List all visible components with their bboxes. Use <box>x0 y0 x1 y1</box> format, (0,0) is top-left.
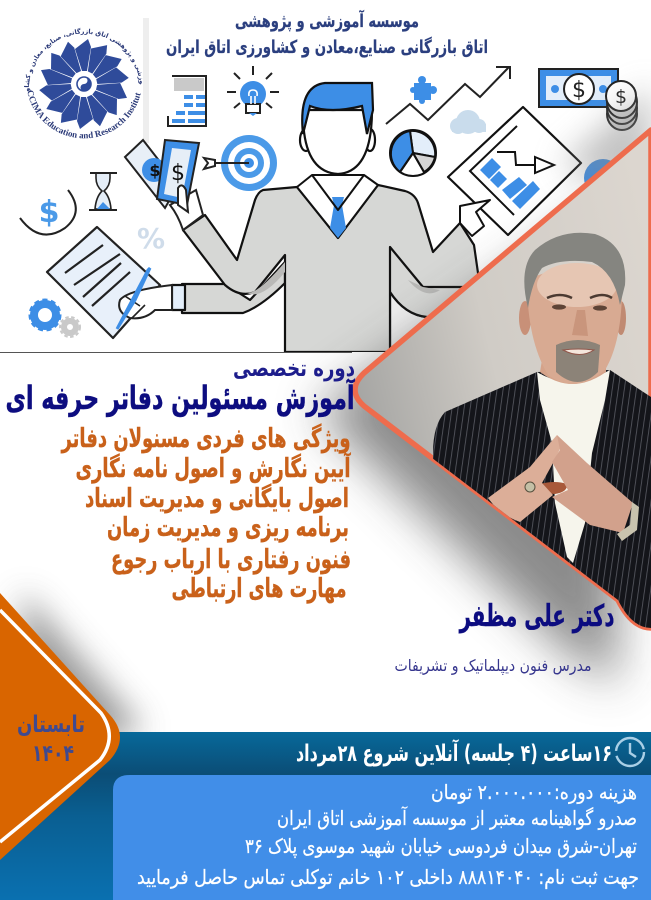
icon: back banknote: $ <box>149 161 161 180</box>
illustration: businessman with finance icons <box>20 18 637 352</box>
registration contact: جهت ثبت نام: ۸۸۸۱۴۰۴۰ داخلی ۱۰۲ خانم توکلی تماس حاصل فرمایید <box>137 865 639 889</box>
face <box>528 274 622 368</box>
pie chart <box>390 130 436 176</box>
ring <box>525 482 535 492</box>
season label: تابستان <box>17 712 85 738</box>
logo blades <box>38 39 130 129</box>
instructor figure <box>433 233 651 640</box>
icon: hourglass <box>89 173 117 210</box>
man body and arms <box>172 185 490 352</box>
logo: ICCIMA Education and Research Institute <box>24 28 142 138</box>
course topics list: اصول بایگانی و مدیریت اسناد <box>85 483 349 514</box>
forehead <box>537 263 617 307</box>
icon: dollar with arc <box>20 190 76 235</box>
icon: hand with front banknote: $ <box>171 161 185 186</box>
course title block <box>6 356 355 417</box>
photo panel: instructor portrait <box>355 130 651 640</box>
banknote icon: $ <box>572 78 586 103</box>
course title: آموزش مسئولین دفاتر حرفه ای <box>6 378 355 417</box>
shadow of orange tag <box>22 591 144 756</box>
coin stack icon <box>606 81 637 130</box>
suit jacket <box>433 370 651 640</box>
course topics list <box>60 423 351 604</box>
blue schedule bar <box>0 732 651 900</box>
header: institute name: موسسه آموزشی و پژوهشی <box>235 9 419 32</box>
course topics list: آیین نگارش و اصول نامه نگاری <box>76 452 351 484</box>
info panel <box>113 775 651 900</box>
ear <box>519 301 531 335</box>
eyes <box>552 304 566 310</box>
icon: back banknote <box>125 140 178 208</box>
finger knuckle <box>540 482 567 494</box>
course topics list: فنون رفتاری با ارباب رجوع <box>111 545 351 575</box>
mouth <box>563 349 594 354</box>
neck <box>540 362 606 384</box>
tablet with bar chart and hand <box>448 107 581 236</box>
orange season tag <box>0 593 120 860</box>
nose shadow <box>572 310 588 336</box>
header: institute name <box>166 9 488 58</box>
man shirt and tie <box>297 175 378 238</box>
icon: hand with front banknote <box>157 140 203 230</box>
icon: clock <box>616 738 644 766</box>
icon: target with arrow <box>204 135 277 191</box>
watch <box>617 502 639 541</box>
course type heading: دوره تخصصی <box>233 356 355 382</box>
icon: cloud <box>450 110 486 134</box>
pale vertical strip <box>143 18 149 143</box>
coin stack icon: $ <box>615 86 627 108</box>
hair <box>524 233 625 308</box>
course topics list: ویژگی های فردی مسنولان دفاتر <box>60 423 351 454</box>
icon: puzzle piece <box>410 76 437 104</box>
shadow above photo panel <box>560 85 651 200</box>
year label: ۱۴۰۴ <box>32 741 74 767</box>
eyebrows <box>547 295 612 298</box>
schedule text: ۱۶ساعت (۴ جلسه) آنلاین شروع ۲۸مرداد <box>296 738 612 767</box>
icon: spreadsheet <box>168 76 206 126</box>
right hand <box>552 435 633 533</box>
white shirt <box>537 370 610 563</box>
icon: light bulb <box>227 66 279 116</box>
chart arrow <box>386 67 510 124</box>
icon: percent: % <box>137 222 165 255</box>
left hand <box>488 435 562 522</box>
man head <box>300 83 375 174</box>
icon: gears <box>30 300 80 337</box>
course topics list: برنامه ریزی و مدیریت زمان <box>107 513 349 543</box>
horizontal rule under illustration <box>0 352 352 353</box>
icon: globe <box>584 159 610 183</box>
banknote icon <box>539 69 618 107</box>
header: institute name: اتاق بازرگانی صنایع،معادن و کشاورزی اتاق ایران <box>166 36 488 58</box>
price: هزینه دوره:۲.۰۰۰.۰۰۰ تومان <box>431 780 637 804</box>
course topics list: مهارت های ارتباطی <box>172 574 346 604</box>
document with pen and hand <box>47 227 172 338</box>
goatee <box>556 340 600 382</box>
instructor title: مدرس فنون دیپلماتیک و تشریفات <box>394 656 592 676</box>
shadow of photo panel <box>316 201 617 686</box>
icon: dollar with arc: $ <box>39 195 59 230</box>
